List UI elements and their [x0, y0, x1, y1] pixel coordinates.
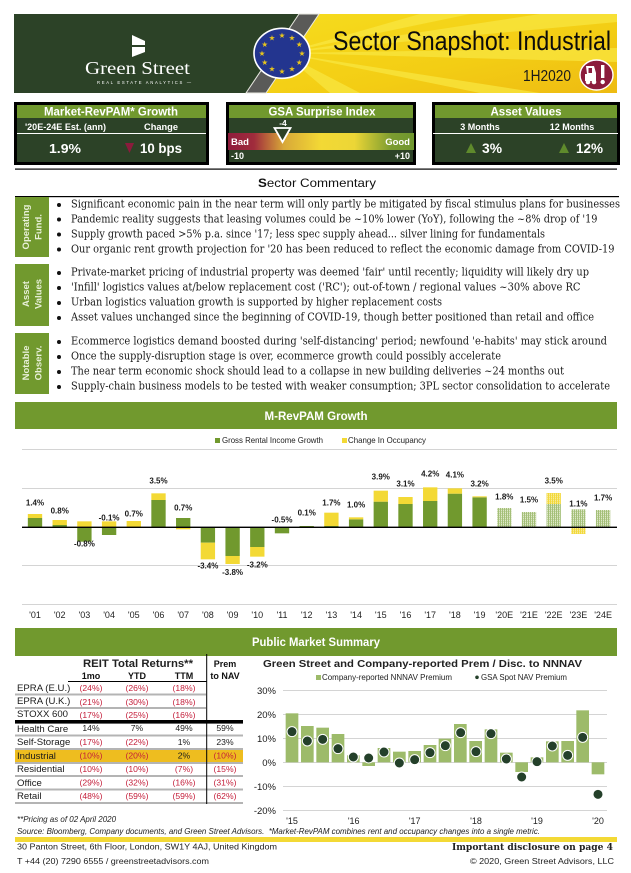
x-axis labels: '14 [350, 610, 362, 620]
label: Asset Values [15, 264, 49, 326]
x-axis labels: '18 [449, 610, 461, 620]
chart: M-RevPAM growth stacked bars [22, 435, 617, 620]
icon: up arrow [559, 143, 569, 153]
chart title: Green Street and Company-reported Prem / Disc. to NNNAV [263, 658, 582, 670]
bullets: asset values: Asset values unchanged since the beginning of COVID-19, though better positioned than retail and office [70, 311, 594, 324]
value labels: 0.1% [298, 508, 316, 517]
table: REIT total returns: Office [17, 778, 42, 789]
x-axis labels [286, 816, 604, 826]
x-axis labels: '17 [424, 610, 436, 620]
value labels: -3.8% [222, 568, 243, 577]
icon: EU flag: ★ [259, 49, 266, 58]
panel: asset values [433, 104, 618, 164]
table: REIT total returns: 1mo [82, 671, 101, 681]
panel: asset values: 3% [482, 141, 502, 156]
bullets: asset values: 'Infill' logistics values at/below replacement cost ('RC'); out-of-town / regional values ~30% above RC [71, 281, 580, 294]
table: REIT total returns: (21%) [80, 697, 103, 707]
panel: asset values: 3 Months [460, 122, 500, 132]
value labels: -0.1% [99, 514, 120, 523]
icon: EU flag: ★ [269, 34, 276, 42]
y-axis labels: -20% [254, 806, 277, 817]
x-axis labels: '22E [545, 610, 563, 620]
value labels: 4.1% [446, 471, 464, 480]
footer: disclosure: Important disclosure on page 4 [452, 842, 613, 853]
table: REIT total returns: (32%) [126, 778, 149, 788]
x-axis labels: '21E [520, 610, 538, 620]
y-axis labels: 0% [262, 758, 277, 769]
x-axis labels: '02 [54, 610, 66, 620]
value labels: 3.5% [149, 477, 168, 486]
value labels [26, 470, 612, 577]
table: REIT total returns: (24%) [80, 683, 103, 693]
table: REIT total returns: (22%) [126, 737, 149, 747]
legend: Company-reported NNNAV Premium [322, 672, 452, 682]
x-axis labels: '09 [227, 610, 238, 620]
value labels: 1.0% [347, 501, 365, 510]
bullets: notable observations: The near term economic shock should lead to a collapse in new building deliveries ~24 months out [71, 364, 565, 378]
table: REIT total returns: (10%) [126, 764, 149, 774]
road [246, 14, 319, 93]
footnotes: Source: Bloomberg, Company documents, and Green Street Advisors. *Market-RevPAM combines rent and occupancy changes into a single metric. [17, 827, 540, 836]
value labels: 3.5% [545, 476, 563, 485]
x-axis labels: '19 [531, 816, 543, 826]
value labels: 0.7% [174, 504, 192, 513]
bullets: operating fundamentals: Supply growth paced >5% p.a. since '17; less spec supply ahead... silver lining for fundamentals [71, 228, 545, 241]
panel: GSA surprise index: Good [385, 137, 410, 148]
x-axis labels: '24E [594, 610, 612, 620]
bullets: asset values: Private-market pricing of industrial property was deemed 'fair' until recently; liquidity will likely dry up [71, 266, 589, 279]
table: REIT total returns: (20%) [126, 750, 149, 760]
value labels: 3.9% [372, 472, 390, 481]
panel: GSA surprise index: GSA Surprise Index [268, 106, 376, 118]
table: REIT total returns: EPRA (E.U.) [17, 683, 70, 694]
table: REIT total returns: 1% [178, 737, 191, 747]
value labels: 1.4% [26, 499, 44, 508]
table: REIT total returns: Industrial [17, 751, 56, 762]
value labels: -0.8% [74, 540, 95, 549]
table: REIT total returns: 2% [178, 750, 191, 760]
table: REIT total returns: (16%) [173, 778, 196, 788]
value labels: 0.7% [125, 510, 143, 519]
table: REIT total returns: Self-Storage [17, 737, 70, 748]
table: REIT total returns: (10%) [80, 750, 103, 760]
label: Operating Fund.: Operating [21, 204, 32, 249]
y-axis labels: -10% [254, 782, 277, 793]
icon: up arrow [466, 143, 476, 153]
panel: sector commentary [15, 176, 620, 394]
table: REIT total returns: 14% [82, 723, 100, 733]
x-axis labels: '19 [474, 610, 485, 620]
icon: EU flag [254, 28, 310, 78]
x-axis labels: '20E [495, 610, 513, 620]
footnotes [17, 815, 540, 836]
label: Asset Values: Asset [21, 280, 32, 307]
logo: Green Street [85, 35, 192, 85]
table: REIT total returns: (17%) [80, 710, 103, 720]
logo: Green Street: Green Street [85, 58, 190, 78]
footer: contact: T +44 (20) 7290 6555 / greenstreetadvisors.com [17, 856, 209, 866]
icon: EU flag: ★ [269, 65, 276, 74]
table: REIT total returns: (29%) [80, 778, 103, 788]
footer: disclosure: © 2020, Green Street Advisors, LLC [470, 856, 614, 866]
panel: asset values: Asset Values [490, 106, 562, 118]
premium bars [286, 710, 604, 774]
table: REIT total returns: TTM [175, 671, 193, 681]
y-axis labels: 30% [257, 686, 277, 697]
table: REIT total returns: (17%) [80, 737, 103, 747]
table: REIT total returns: STOXX 600 [17, 709, 68, 720]
icon: EU flag: ★ [289, 65, 296, 74]
panel: GSA surprise index: +10 [395, 151, 410, 161]
legend: GSA Spot NAV Premium [481, 672, 567, 682]
panel: Market-RevPAM growth: 1.9% [49, 141, 81, 156]
value labels: 0.8% [51, 506, 69, 515]
x-axis labels: '15 [286, 816, 298, 826]
label: Operating Fund. [15, 197, 49, 257]
label: Notable Observ.: Notable [21, 346, 32, 380]
bullets: notable observations [57, 335, 610, 392]
x-axis labels: '15 [375, 610, 387, 620]
table: REIT total returns: 7% [131, 723, 144, 733]
table: REIT total returns: YTD [128, 671, 147, 681]
table: REIT total returns: Health Care [17, 724, 68, 735]
value labels: 4.2% [421, 470, 439, 479]
table: REIT total returns: 49% [175, 723, 193, 733]
value labels: 3.2% [470, 479, 489, 488]
x-axis labels: '03 [79, 610, 90, 620]
table: REIT total returns: (10%) [80, 764, 103, 774]
panel: Market-RevPAM growth: '20E-24E Est. (ann) [25, 122, 106, 132]
heading: Sector Commentary [258, 176, 376, 190]
bullets: asset values: Urban logistics valuation growth is supported by higher replacement costs [71, 296, 442, 309]
table: REIT total returns: (7%) [175, 764, 193, 774]
logo: Green Street: REAL ESTATE ANALYTICS — [97, 80, 192, 85]
footer: contact [17, 842, 277, 866]
label: Notable Observ. [15, 333, 49, 394]
x-axis labels: '12 [301, 610, 313, 620]
bullets: asset values [57, 266, 594, 324]
x-axis labels [29, 610, 612, 620]
value labels: 1.7% [322, 499, 341, 508]
footer: disclosure [452, 842, 614, 866]
value labels: -3.2% [247, 561, 268, 570]
icon: EU flag: ★ [261, 40, 268, 49]
panel: GSA surprise index: -10 [231, 151, 244, 161]
panel: Market-RevPAM growth: Market-RevPAM* Growth [44, 106, 178, 118]
icon: EU flag: ★ [296, 58, 303, 67]
table: REIT total returns: 59% [216, 723, 234, 733]
x-axis labels: '04 [103, 610, 115, 620]
table: REIT total returns: REIT Total Returns** [83, 658, 194, 670]
x-axis labels: '11 [276, 610, 288, 620]
icon: forklift [580, 60, 613, 90]
chart: premium / discount to NNNAV [254, 658, 607, 826]
panel: GSA surprise index: Bad [231, 137, 249, 148]
icon: EU flag: ★ [279, 31, 286, 40]
heading: M-RevPAM growth [15, 402, 617, 429]
x-axis labels: '16 [348, 816, 360, 826]
table: REIT total returns: (31%) [214, 778, 237, 788]
value labels: 3.1% [396, 480, 415, 489]
spot NAV dots [287, 727, 603, 799]
label: Operating Fund.: Fund. [34, 214, 44, 240]
icon: EU flag: ★ [279, 67, 286, 76]
table: REIT total returns: (48%) [80, 791, 103, 801]
x-axis labels: '23E [570, 610, 587, 620]
icon: EU flag: ★ [289, 34, 296, 42]
x-axis labels: '18 [470, 816, 482, 826]
x-axis labels: '10 [251, 610, 263, 620]
table: REIT total returns: (62%) [214, 791, 237, 801]
table: REIT total returns: EPRA (U.K.) [17, 696, 70, 707]
table: REIT total returns [15, 654, 243, 804]
heading: public market summary: Public Market Summary [252, 637, 381, 649]
table: REIT total returns: (10%) [214, 750, 237, 760]
header banner [14, 14, 617, 93]
gauge [228, 133, 414, 150]
heading: M-RevPAM growth: M-RevPAM Growth [264, 411, 368, 423]
panel: asset values: 12 Months [550, 122, 594, 132]
table: REIT total returns: (59%) [173, 791, 196, 801]
marker [274, 128, 290, 142]
x-axis labels: '17 [409, 816, 421, 826]
x-axis labels: '20 [592, 816, 604, 826]
value labels: -0.5% [272, 516, 292, 525]
x-axis labels: '16 [400, 610, 411, 620]
value labels: 1.7% [594, 494, 612, 503]
x-axis labels: '13 [326, 610, 337, 620]
table: REIT total returns: Retail [17, 791, 42, 802]
table: REIT total returns: (15%) [214, 764, 237, 774]
panel: GSA surprise index: -4 [279, 118, 287, 128]
y-axis labels [254, 686, 277, 817]
bullets: operating fundamentals [57, 198, 620, 256]
value labels: 1.8% [495, 492, 513, 501]
panel: GSA surprise index [228, 104, 414, 164]
icon: down arrow [125, 143, 134, 153]
x-axis labels: '06 [153, 610, 164, 620]
bullets: notable observations: Once the supply-disruption stage is over, ecommerce growth could possibly accelerate [71, 350, 501, 362]
label: Notable Observ.: Observ. [34, 346, 44, 380]
panel: Market-RevPAM growth [16, 104, 208, 164]
label: Asset Values: Values [34, 279, 44, 309]
icon: EU flag: ★ [296, 40, 303, 49]
value labels: -3.4% [197, 561, 218, 570]
x-axis labels: '05 [128, 610, 140, 620]
icon: EU flag: ★ [261, 58, 268, 67]
panel: asset values: 12% [576, 141, 603, 156]
table: REIT total returns: (16%) [173, 710, 196, 720]
table: REIT total returns: (26%) [126, 683, 149, 693]
footnotes: **Pricing as of 02 April 2020 [17, 815, 117, 824]
legend [215, 435, 427, 445]
x-axis labels: '01 [29, 610, 41, 620]
table: REIT total returns: (30%) [126, 697, 149, 707]
table: REIT total returns: to NAV [210, 671, 240, 681]
icon: EU flag: ★ [299, 49, 306, 58]
table: REIT total returns: Prem [214, 659, 236, 669]
value labels: 1.1% [569, 500, 588, 509]
value labels: 1.5% [520, 496, 538, 505]
legend [316, 672, 567, 682]
x-axis labels: '08 [202, 610, 214, 620]
panel: Market-RevPAM growth: 10 bps [140, 141, 182, 156]
legend: Gross Rental Income Growth [222, 435, 323, 445]
panel: Market-RevPAM growth: Change [144, 122, 178, 132]
x-axis labels: '07 [177, 610, 189, 620]
heading: public market summary [15, 628, 617, 656]
y-axis labels: 20% [257, 710, 277, 721]
table: REIT total returns: Residential [17, 764, 64, 775]
table: REIT total returns: (18%) [173, 697, 196, 707]
table: REIT total returns: (59%) [126, 791, 149, 801]
table: REIT total returns: 23% [216, 737, 234, 747]
legend: Change In Occupancy [348, 435, 427, 445]
bars [28, 487, 610, 564]
table: REIT total returns: (25%) [126, 710, 149, 720]
y-axis labels: 10% [257, 734, 277, 745]
table: REIT total returns: (18%) [173, 683, 196, 693]
period: 1H2020 [523, 68, 571, 85]
footer: contact: 30 Panton Street, 6th Floor, London, SW1Y 4AJ, United Kingdom [17, 842, 277, 852]
